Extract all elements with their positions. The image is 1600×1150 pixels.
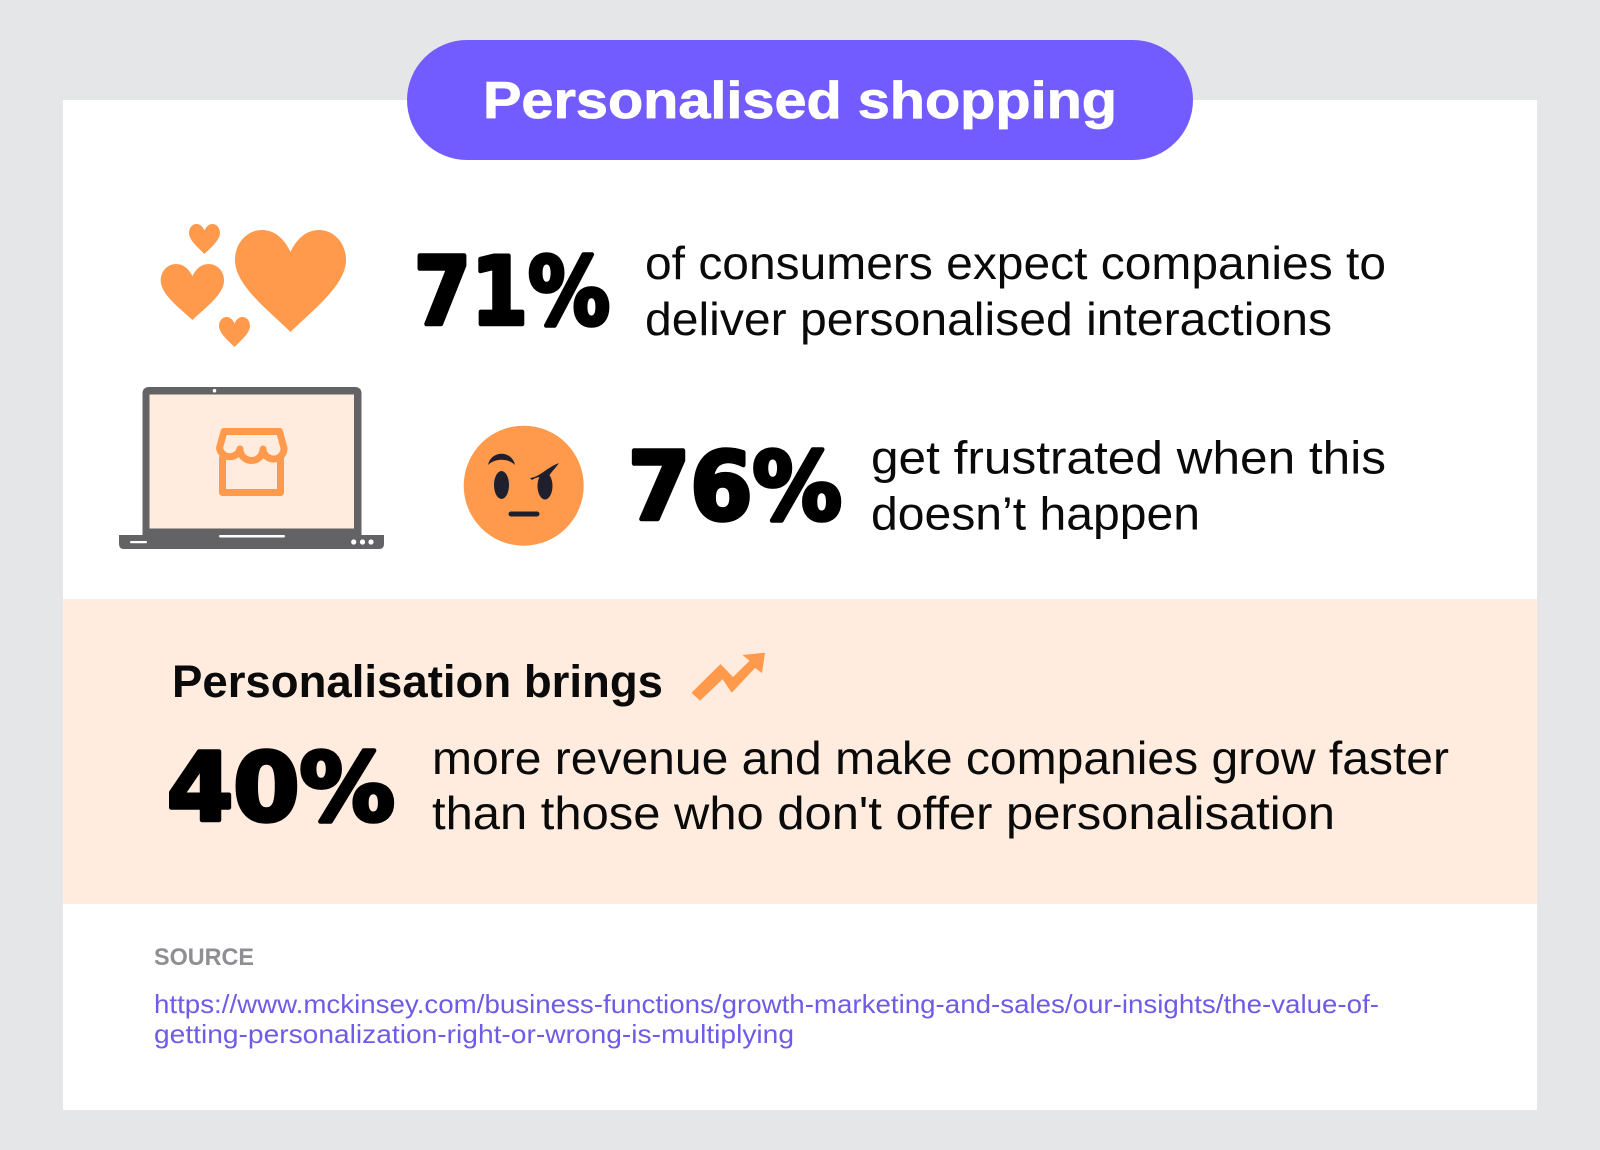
text: 71% description [645, 237, 1386, 345]
text: 40% description: than those who don't offer personalisation [432, 787, 1335, 839]
icon: laptop with storefront [119, 387, 384, 549]
source link [154, 989, 1379, 1049]
icon: rising arrow [692, 653, 765, 701]
icon: hearts [161, 224, 346, 347]
text: 40% description: more revenue and make companies grow faster [432, 732, 1449, 784]
stat: 40%: 40% [167, 734, 395, 843]
title: Personalised shopping [483, 72, 1117, 130]
source link: https://www.mckinsey.com/business-functions/growth-marketing-and-sales/our-insights/the-value-of- [154, 989, 1379, 1019]
text: 76% description: get frustrated when this [871, 432, 1386, 484]
text: 71% description: of consumers expect companies to [645, 237, 1386, 289]
text: 71% description: deliver personalised interactions [645, 293, 1332, 345]
text: 76% description [871, 432, 1386, 540]
text: 76% description: doesn’t happen [871, 488, 1200, 540]
title pill [407, 40, 1193, 160]
text: 40% description [432, 732, 1449, 839]
stat: 71%: 71% [414, 238, 610, 347]
panel: highlight band [63, 599, 1537, 904]
source link: getting-personalization-right-or-wrong-is-multiplying [154, 1019, 794, 1049]
source label: SOURCE [154, 944, 254, 971]
heading: Personalisation brings: Personalisation brings [172, 656, 663, 707]
icon: storefront [220, 432, 284, 492]
icon: annoyed face [464, 426, 584, 546]
stat: 76%: 76% [628, 433, 842, 542]
